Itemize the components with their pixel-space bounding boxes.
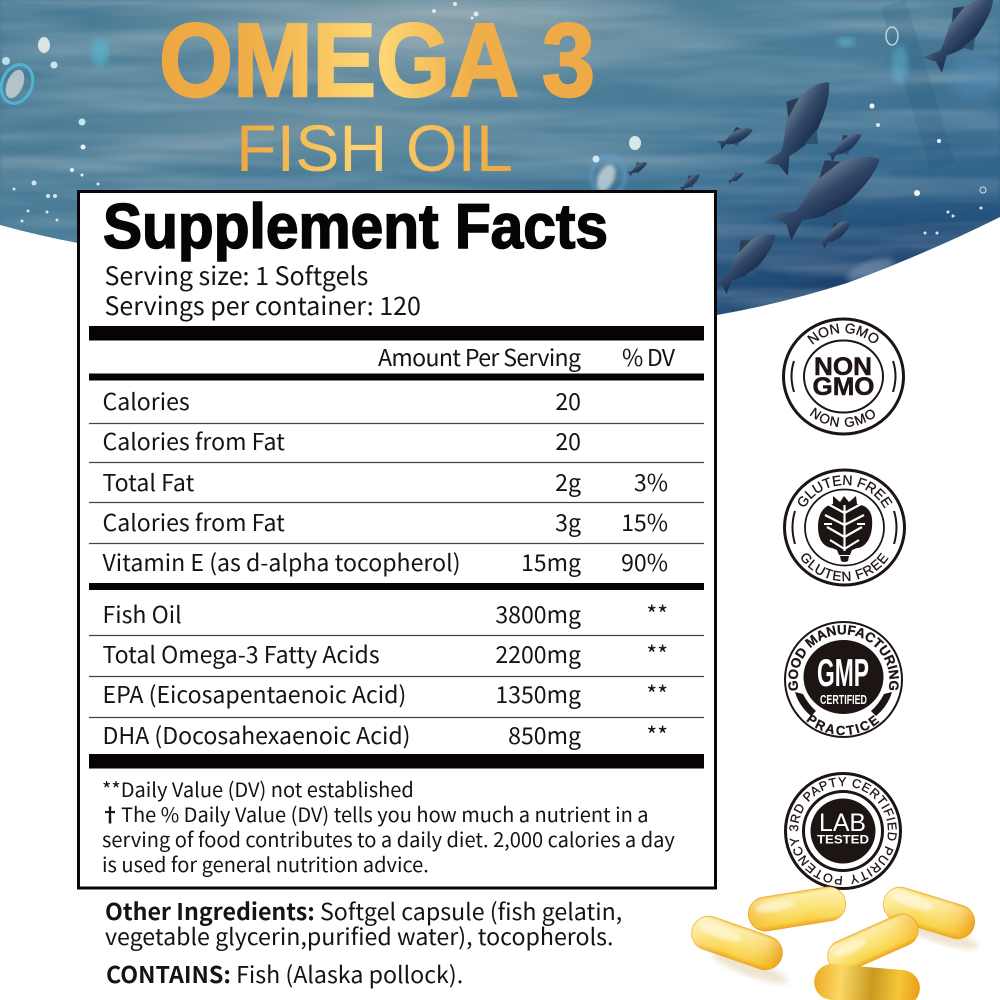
badge: Non GMO: NON [814, 353, 872, 381]
table: omega fatty acids: ** [646, 717, 668, 751]
thick rule [89, 326, 704, 340]
serving information: Servings per container: 120 [104, 287, 421, 323]
serving information: Serving size: 1 Softgels [104, 257, 368, 293]
icon: wheat [818, 496, 872, 562]
column headers [378, 339, 676, 373]
other ingredients [105, 893, 622, 952]
table: omega fatty acids: ** [646, 676, 668, 710]
capsule [823, 909, 923, 977]
table: omega fatty acids: EPA (Eicosapentaenoic Acid) [102, 676, 406, 710]
subtitle: FISH OIL: FISH OIL [236, 111, 513, 185]
badge: GMP certified: CERTIFIED [820, 692, 867, 707]
title: OMEGA 3: OMEGA 3 [159, 3, 595, 119]
table: general nutrients: 20 [555, 383, 581, 417]
table: general nutrients: 2g [555, 464, 581, 498]
other ingredients: vegetable glycerin,purified water), tocopherols. [105, 918, 613, 952]
table: omega fatty acids: Total Omega-3 Fatty Acids [102, 636, 380, 670]
table: general nutrients: Calories from Fat [102, 504, 285, 538]
table: general nutrients: Calories [102, 383, 190, 417]
table: omega fatty acids: Fish Oil [102, 596, 182, 630]
capsule [746, 885, 848, 933]
capsule [879, 883, 979, 943]
footnotes: serving of food contributes to a daily diet. 2,000 calories a day [102, 824, 675, 853]
badge: lab tested: TESTED [817, 832, 869, 846]
capsule [813, 962, 921, 1000]
badge: Gluten Free [783, 468, 906, 586]
table: general nutrients: 20 [555, 423, 581, 457]
table: general nutrients: 15% [621, 504, 668, 538]
table: general nutrients: 90% [621, 544, 668, 578]
other ingredients: Other Ingredients: Softgel capsule (fish gelatin, [105, 893, 622, 927]
badge: GMP certified: GOOD MANUFACTURING [788, 624, 899, 691]
column headers: Amount Per Serving [378, 339, 581, 373]
badge: Non GMO: GMO [812, 373, 874, 401]
table: general nutrients: Total Fat [102, 464, 195, 498]
school of fish [625, 0, 1000, 301]
column headers: % DV [622, 339, 676, 373]
badge: Non GMO [782, 318, 905, 436]
bubbles [0, 2, 986, 288]
table: general nutrients: Vitamin E (as d-alpha tocopherol) [102, 544, 460, 578]
table: omega fatty acids: DHA (Docosahexaenoic Acid) [102, 717, 410, 751]
table: omega fatty acids: 1350mg [495, 676, 581, 710]
table: general nutrients [89, 383, 704, 578]
table: general nutrients: Calories from Fat [102, 423, 285, 457]
serving information [104, 257, 421, 323]
footnotes: † [100, 799, 120, 828]
badge: GMP certified [784, 621, 903, 738]
panel: supplement facts [78, 192, 716, 888]
table: general nutrients: 3% [634, 464, 668, 498]
softgel capsules [687, 883, 981, 1000]
capsule [687, 912, 787, 974]
badge: Non GMO: NON GMO [807, 323, 878, 344]
table: general nutrients: 3g [555, 504, 581, 538]
badge: Gluten Free: GLUTEN FREE [801, 552, 889, 582]
table: omega fatty acids: 3800mg [495, 596, 581, 630]
background: underwater scene [0, 0, 1000, 315]
heading: Supplement Facts: Supplement Facts [103, 192, 608, 262]
footnotes: The % Daily Value (DV) tells you how much a nutrient in a [121, 799, 649, 828]
badge: Non GMO: NON GMO [810, 408, 875, 427]
badge: lab tested: POTENCY 3RD PAPTY CERTIFIED PURITY [789, 777, 897, 885]
table: general nutrients: 15mg [521, 544, 581, 578]
badge: GMP certified: PRACTICE [806, 714, 880, 736]
table: omega fatty acids: ** [646, 636, 668, 670]
footnotes [100, 774, 675, 878]
badge: GMP certified: GMP [817, 652, 869, 695]
footnotes: **Daily Value (DV) not established [102, 774, 414, 803]
table: omega fatty acids: 850mg [508, 717, 581, 751]
table: omega fatty acids: 2200mg [495, 636, 581, 670]
badge: Gluten Free: GLUTEN FREE [798, 475, 893, 508]
badge: lab tested: LAB [819, 809, 866, 837]
table: omega fatty acids [89, 596, 704, 751]
contains: CONTAINS: Fish (Alaska pollock). [106, 956, 463, 990]
footnotes: is used for general nutrition advice. [102, 849, 429, 878]
table: omega fatty acids: ** [646, 596, 668, 630]
